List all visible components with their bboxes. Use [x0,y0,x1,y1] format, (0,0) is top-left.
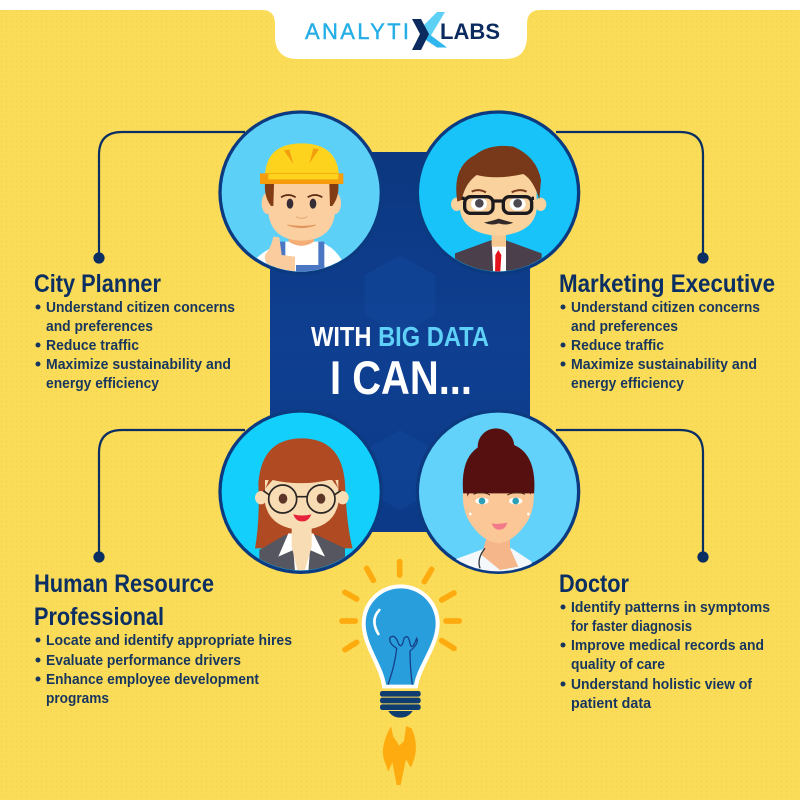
text: city planner: City Planner [34,270,161,298]
text: city planner: Reduce traffic [46,338,139,354]
text: marketing executive: Maximize sustainability and [571,357,757,373]
text: doctor: quality of care [571,657,665,673]
text: human resource professional: programs [46,691,109,707]
connector: city planner [94,132,245,262]
text: human resource professional [34,570,292,707]
text: doctor: Improve medical records and [571,638,764,654]
text: marketing executive: Understand citizen concerns [571,300,760,316]
text: city planner: and preferences [46,319,153,335]
bulb glass [362,584,440,688]
text: human resource professional: Locate and identify appropriate hires [46,633,292,649]
icon: human resource portrait [218,409,383,574]
text: human resource professional: Professional [34,603,164,631]
text: doctor: patient data [571,696,652,712]
text: marketing executive [559,270,775,392]
bulb rays [342,562,459,650]
text: doctor: Understand holistic view of [571,677,752,693]
text: doctor: Identify patterns in symptoms [571,600,770,616]
text: city planner [34,270,235,392]
logo: ANALYTI [305,19,409,44]
panel tagline: I CAN... [330,351,472,404]
text: doctor [559,570,770,712]
text: doctor: Doctor [559,570,629,598]
logo [262,0,540,59]
text: marketing executive: energy efficiency [571,376,684,392]
text: city planner: energy efficiency [46,376,159,392]
text: human resource professional: Human Resource [34,570,214,598]
text: city planner: Understand citizen concerns [46,300,235,316]
text: marketing executive: Reduce traffic [571,338,664,354]
text: city planner: Maximize sustainability and [46,357,231,373]
center panel [270,152,530,532]
icon: marketing executive portrait [416,110,580,280]
text: doctor: for faster diagnosis [571,619,692,635]
text: human resource professional: Evaluate performance drivers [46,653,241,669]
icon: light bulb with rocket flame [342,562,459,785]
icon: doctor portrait [416,409,580,577]
icon: city planner portrait [218,110,383,280]
logo: LABS [440,19,500,44]
text: human resource professional: Enhance employee development [46,672,259,688]
connector: doctor [556,430,708,562]
panel heading: WITH BIG DATA [311,321,489,352]
bulb base [380,691,421,718]
connector: human resource professional [94,430,245,562]
rocket flame [383,726,416,785]
connector: marketing executive [556,132,708,262]
text: marketing executive: and preferences [571,319,678,335]
text: marketing executive: Marketing Executive [559,270,775,298]
